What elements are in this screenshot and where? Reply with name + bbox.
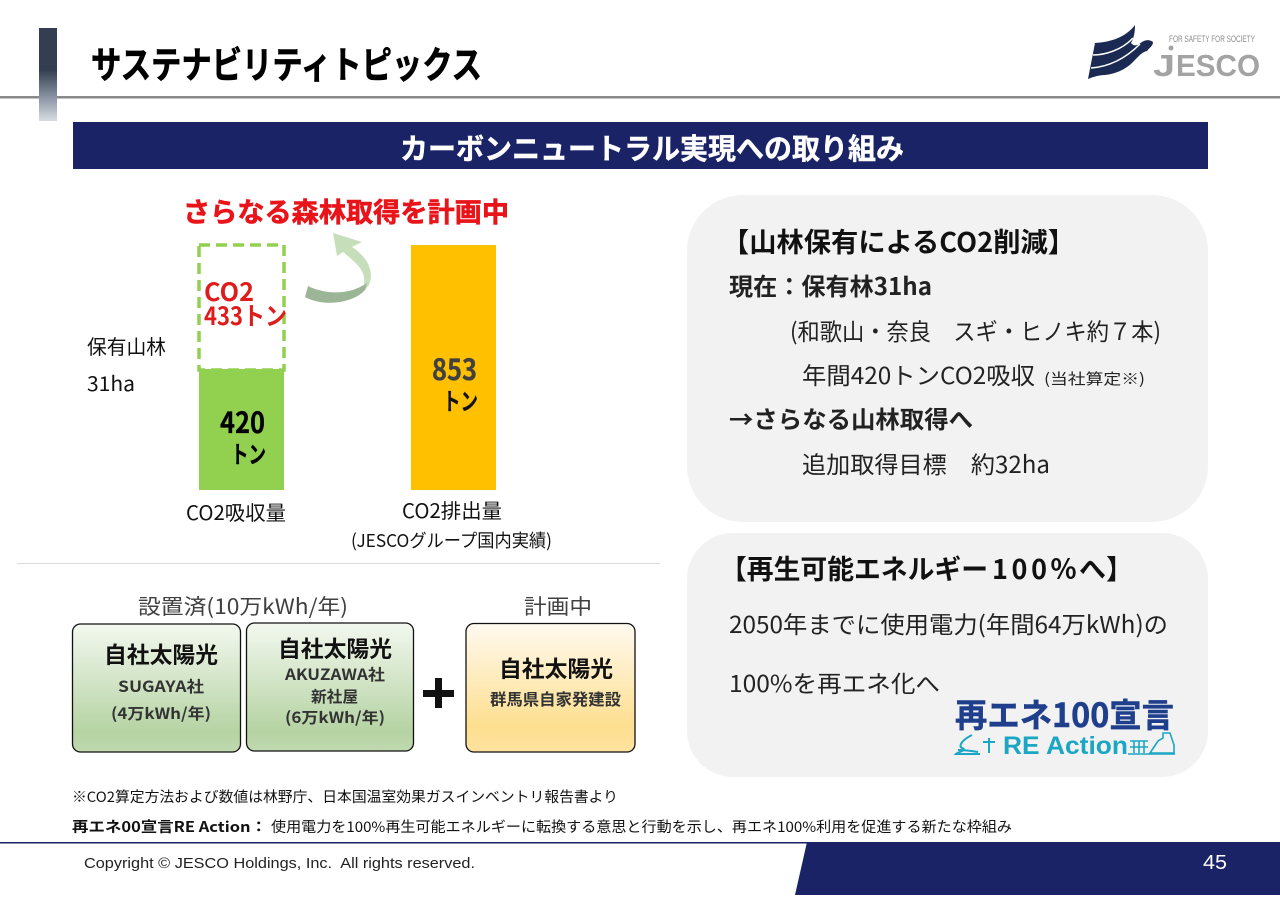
callout heading: さらなる森林取得を計画中 — [183, 191, 509, 230]
card: Gunma: 群馬県自家発建設 — [490, 686, 621, 710]
axis note: (JESCOグループ国内実績) — [351, 527, 552, 553]
panel heading: 【再生可能エネルギー — [720, 548, 988, 587]
card: SUGAYA: SUGAYA社 — [118, 675, 205, 697]
icon: JESCO waves — [1088, 25, 1153, 79]
panel heading: へ】 — [1079, 548, 1133, 587]
card: AKUZAWA — [246, 623, 414, 751]
label: CO2 433 tons: 433トン — [204, 297, 287, 333]
panel heading: 【山林保有によるCO2削減】 — [722, 221, 1075, 260]
logo dot — [1168, 46, 1174, 50]
header rule — [0, 96, 1280, 98]
logo wordmark: J — [1153, 48, 1175, 83]
label: CO2 433 tons: CO2 — [204, 273, 254, 309]
panel: renewable energy — [687, 533, 1208, 777]
icon: plus — [423, 678, 454, 708]
card: AKUZAWA: AKUZAWA社 — [284, 663, 386, 685]
line: 2050: 2050年までに使用電力(年間64万kWh)の — [729, 606, 1168, 640]
heading: planned: 計画中 — [524, 591, 592, 621]
forest label: 31ha — [87, 368, 135, 397]
bar: absorbed 420 — [199, 369, 284, 490]
section banner — [73, 122, 1208, 169]
panel heading: ％ — [1050, 548, 1077, 587]
arrow: curved up — [305, 233, 371, 303]
panel heading: 100 — [992, 548, 1047, 587]
copyright: Copyright © JESCO Holdings, Inc. All rights reserved. — [84, 856, 475, 872]
bar: target forest dashed — [199, 245, 284, 370]
card: SUGAYA: 自社太陽光 — [104, 638, 218, 670]
forest label: 保有山林 — [87, 331, 166, 360]
logo wordmark: ESCO — [1176, 48, 1260, 83]
line: species: (和歌山・奈良 スギ・ヒノキ約７本) — [790, 313, 1161, 347]
title: サステナビリティトピックス — [91, 35, 482, 89]
panel: forest CO2 reduction — [687, 195, 1208, 522]
page number: 45 — [1203, 852, 1227, 874]
card: AKUZAWA: 新社屋 — [311, 685, 358, 707]
line: target: 追加取得目標 約32ha — [802, 446, 1050, 480]
line: absorption: 年間420トンCO2吸収 — [802, 357, 1035, 391]
card: AKUZAWA: (6万kWh/年) — [285, 706, 385, 728]
logo: RE Action: RE Action — [1003, 732, 1128, 760]
card: SUGAYA — [72, 624, 240, 752]
footnote: RE Action: 使用電力を100%再生可能エネルギーに転換する意思と行動を示し、再エネ100%利用を促進する新たな枠組み — [271, 816, 1012, 837]
logo: JESCO — [1088, 25, 1260, 83]
label: 420 tons: 420 — [220, 400, 265, 442]
axis label: emission: CO2排出量 — [402, 495, 502, 524]
heading: installed: 設置済(10万kWh/年) — [138, 591, 348, 621]
footnote: RE Action: 再エネ00宣言RE Action： — [72, 816, 267, 837]
solar section — [72, 591, 635, 752]
footer — [0, 842, 1280, 895]
card: Gunma — [466, 624, 635, 752]
label: 853 tons: 853 — [432, 347, 477, 389]
banner heading: カーボンニュートラル実現への取り組み — [400, 126, 904, 168]
bar chart: CO2 absorption vs emission — [186, 245, 552, 553]
line: current: 現在：保有林31ha — [729, 267, 932, 302]
logo: RE Action: 再エネ100宣言 — [955, 689, 1174, 737]
footer block — [795, 842, 1280, 895]
card: SUGAYA: (4万kWh/年) — [111, 702, 211, 724]
footnotes — [72, 786, 1012, 837]
card: AKUZAWA: 自社太陽光 — [278, 632, 392, 664]
card: Gunma: 自社太陽光 — [499, 652, 613, 684]
line: 100 percent: 100%を再エネ化へ — [729, 665, 940, 699]
label: 420 tons: トン — [231, 435, 266, 470]
footnote: method: ※CO2算定方法および数値は林野庁、日本国温室効果ガスインベントリ報告書より — [72, 786, 618, 807]
axis label: absorption: CO2吸収量 — [186, 497, 286, 526]
divider — [17, 563, 660, 564]
header accent tab — [39, 28, 57, 121]
bar: emission 853 — [411, 245, 496, 490]
label: 853 tons: トン — [443, 382, 478, 417]
icon: wave and turbine — [956, 735, 995, 754]
line: further acquisition: →さらなる山林取得へ — [729, 400, 973, 435]
logo: RE Action — [955, 689, 1175, 760]
line: note: (当社算定※) — [1044, 368, 1145, 389]
icon: solar panel and factory — [1128, 733, 1175, 754]
